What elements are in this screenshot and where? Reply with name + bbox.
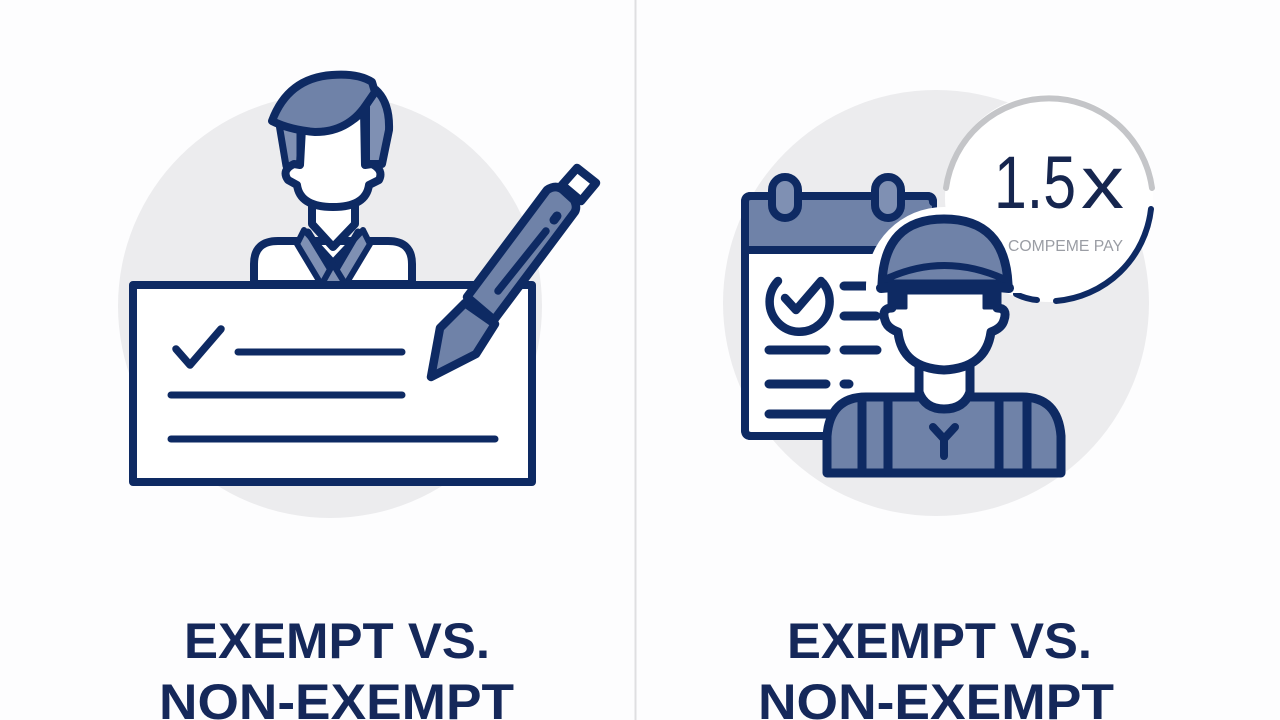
icon: hourly worker [827,207,1061,473]
icon: calendar checklist [745,177,934,436]
icon: pen [431,168,596,377]
badge ring [945,94,1153,302]
title left: EXEMPT VS. [184,613,490,669]
background circle right [723,90,1149,516]
background circle left [118,94,542,518]
checkmark [176,329,221,365]
document form [133,285,532,482]
badge caption: COMPEME PAY [1008,238,1123,255]
title left [159,613,514,720]
badge value: 1.5 [994,141,1076,224]
title right: EXEMPT VS. [787,613,1092,669]
panel: non-exempt [723,90,1153,516]
panel: exempt [118,75,596,518]
title right [758,613,1114,720]
badge value: x [1081,141,1124,224]
checklist rows [770,281,830,332]
icon: salaried employee [254,75,412,284]
